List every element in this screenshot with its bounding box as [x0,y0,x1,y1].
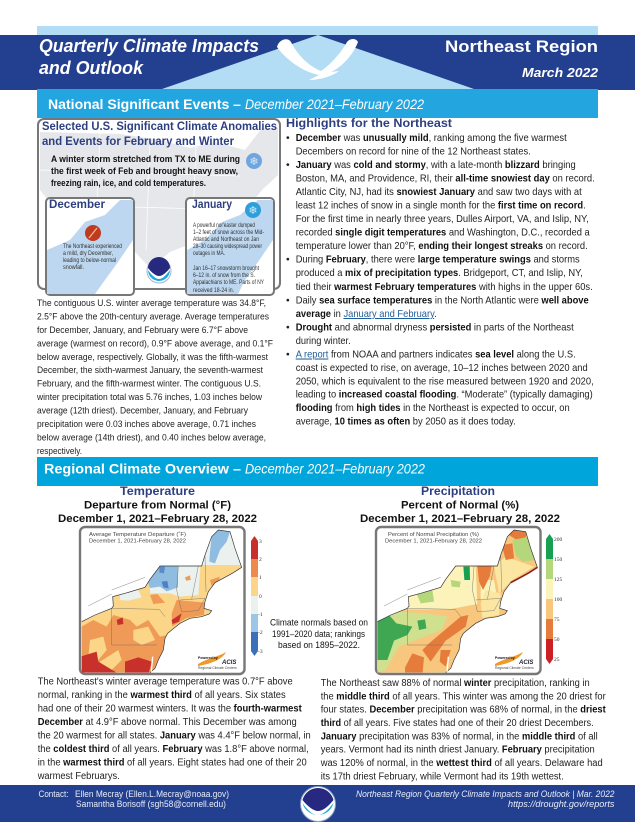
text block: temperature summary: warmest Februarys. [37,771,120,782]
text block: national summary: average (warmest on record), 0.9°F above average, and 0.1°F [37,338,273,349]
legend: precipitation colour scale: 50 [554,637,560,643]
legend: temperature colour scale: 3 [259,539,262,545]
December text: leading to below-normal [63,257,116,264]
heading: precipitation: Percent of Normal (%) [401,500,519,512]
chart: precipitation percent of normal map [376,527,541,675]
bullet: sea level report: leading to increased coastal flooding. “Moderate” (typically damaging) [296,390,593,401]
map title [89,531,186,544]
bullet: sea level report: coast is expected to rise, on average, 10–12 inches between 2020 and [296,363,588,374]
December text: a mild, dry December, [63,250,113,257]
legend: temperature colour scale: 0 [259,594,262,600]
note: climate normals: Climate normals based on [270,618,368,629]
heading: precipitation [360,486,560,525]
heading: temperature: December 1, 2021–February 28, 2022 [58,513,257,525]
bullet: January: For the first time in nearly three years, Dulles Airport, VA, and Islip, NY, [296,214,589,225]
title: and Outlook [39,57,145,78]
note: climate normals: based on 1895–2022. [278,640,360,651]
section heading: regional climate overview [37,457,598,486]
ACIS logo: Regional Climate Centers [198,666,237,670]
legend: temperature colour scale: -3 [258,649,263,655]
text block: national summary: precipitation were 0.03 inches above average, 0.71 inches [37,419,256,430]
inset: January: January [192,199,233,211]
bullet: February: produced a mix of precipitation types. Bridgeport, CT, and Islip, NY, [296,268,583,279]
map title [385,532,482,544]
winter storm text: freezing rain, ice, and cold temperatures. [51,177,206,188]
icon: warm temperature [85,225,101,241]
footer [0,785,635,822]
bullet: February: tied their warmest February temperatures with highs in the upper 60s. [296,282,593,293]
icon: triangle and bird emblem [162,35,474,89]
text block: precipitation summary: its 17th driest February, while Vermont had its 19th wettest. [321,771,564,782]
text block: temperature summary: the coldest third of all years. February was 1.8°F above normal, [38,744,309,755]
text block: national summary: respectively. [37,446,82,457]
contact details: Contact: [38,789,68,799]
contact details [38,789,229,809]
panel heading: Selected U.S. Significant Climate Anomalies [42,121,277,133]
heading: highlights: Highlights for the Northeast [286,118,452,130]
ACIS logo: Powered by [198,656,218,660]
report citation: https://drought.gov/reports [508,799,615,809]
winter storm text: the first week of Feb and brought heavy snow, [51,165,238,176]
heading: temperature: Departure from Normal (°F) [84,500,231,512]
text block: national summary: The contiguous U.S. winter average temperature was 34.8°F, [37,298,266,309]
text block: national summary: average (12th driest). December, January, and February [37,406,248,417]
legend: temperature colour scale: 2 [259,557,262,563]
bullet: sea level report: average, 10 times as often by 2050 as it does today. [296,416,516,427]
text block: national summary: below average, respectively. Globally, it was the fifth-warmest [37,352,268,363]
bullet: December [286,133,567,158]
bullet: January: • [286,160,290,171]
January text: 6–12 in. of snow from the S. [193,272,255,279]
January text: Jan 16–17 snowstorm brought [193,265,259,272]
map title: Average Temperature Departure (˚F) [89,531,186,538]
text block: temperature summary [37,677,311,782]
bullet: sea surface temperatures: Daily sea surface temperatures in the North Atlantic were well above [296,296,589,307]
inset: December [46,198,134,295]
section heading: national significant events: National Significant Events – [48,97,242,112]
bullet: sea level report: flooding from high tides in the Northeast is expected to occur, on [296,403,570,414]
heading: precipitation: Precipitation [421,486,495,498]
bullet: sea level report: 2050, which is equivalent to the rise measured between 1920 and 2020, [296,376,594,387]
January text: received 18-24 in. [193,287,234,294]
note: climate normals [270,618,368,651]
bullet: February: During February, there were large temperature swings and storms [296,255,580,266]
panel heading [42,121,277,148]
January text: 28–30 causing widespread power [193,243,262,250]
legend: temperature colour scale: 1 [259,575,262,581]
title [39,35,259,78]
text block: precipitation summary: The Northeast saw 88% of normal winter precipitation, ranking in [321,678,590,689]
map title: December 1, 2021-February 28, 2022 [89,538,186,544]
winter storm text [51,153,240,188]
text block: national summary [36,298,273,457]
legend: temperature colour scale: -2 [258,630,263,636]
January text: Atlantic and Northeast on Jan [193,236,259,243]
heading: temperature [58,486,257,525]
legend: precipitation colour scale: 75 [554,617,560,623]
section heading: national significant events: December 2021–February 2022 [245,96,424,112]
ACIS logo: ACIS [221,660,236,666]
report citation: Northeast Region Quarterly Climate Impacts and Outlook | Mar. 2022 [356,789,615,799]
bullet: drought: • [286,323,290,334]
legend: precipitation colour scale: 25 [554,657,560,663]
text block: precipitation summary [320,678,606,782]
text block: temperature summary: December at 4.9°F above normal. This December was among [38,717,297,728]
ACIS logo [198,652,237,670]
contact details: Ellen Mecray (Ellen.L.Mecray@noaa.gov) [75,789,229,799]
inset: December: December [49,199,106,211]
legend: precipitation colour scale: 200 [554,537,562,543]
section heading: national significant events [37,89,598,118]
bullet: January: recorded single digit temperatures and Washington, D.C., recorded a [296,228,590,238]
text block: national summary: below average (14th driest), and 0.40 inches below average, [37,432,266,444]
text block: precipitation summary: four states. December precipitation was 68% of normal, in the driest [321,705,606,716]
bullet: sea level report [286,350,594,427]
bullet: February: • [286,255,290,266]
bullet: January: Boston, MA, and Providence, RI, their all-time snowiest day on record. [296,174,595,184]
January text: Appalachians to ME. Parts of NY [193,279,264,286]
icon: nor'easter snow: ❄ [248,205,258,217]
bullet: December: Decembers on record for nine of the 12 Northeast states. [296,146,531,158]
bullet: sea surface temperatures: • [286,296,290,307]
text block: national summary: December, the sixth-warmest January, the seventh-warmest [37,365,263,376]
ACIS logo: Regional Climate Centers [495,666,534,670]
text block: precipitation summary: third of all years. Five states had one of their 20 driest Decembers. [321,718,594,729]
text block: national summary: 2.5°F above the 20th-century average. Average temperatures [37,311,269,322]
ACIS logo [495,652,534,670]
region and date: March 2022 [522,65,599,80]
bullet: drought: Drought and abnormal dryness persisted in parts of the Northeast [296,323,574,334]
section heading: regional climate overview: Regional Climate Overview – [44,462,242,476]
legend: precipitation colour scale: 150 [554,557,562,563]
region and date: Northeast Region [445,37,598,56]
January text [193,222,264,294]
region and date [445,37,599,80]
January text: 1–2 feet of snow across the Mid- [193,229,264,236]
bullet: December: December was unusually mild, ranking among the five warmest [296,133,567,144]
text block: temperature summary: had one of their 20 warmest winters. It was the fourth-warmest [38,704,302,714]
legend: precipitation colour scale: 125 [554,577,562,583]
text block: temperature summary: the 20 warmest for all states. January was 4.4°F below normal, in [38,731,311,742]
bullet: January: least 12 inches of snow in a single month for the first time on record. [296,200,586,212]
heading: temperature: Temperature [120,486,195,498]
legend: temperature colour scale: -1 [258,612,263,618]
bullet: sea level report: • [286,350,290,360]
bullet: sea surface temperatures: average in January and February. [296,309,437,320]
text block: precipitation summary: the middle third of all years. This winter was among the 20 driest for [321,691,606,702]
map title: December 1, 2021-February 28, 2022 [385,538,482,544]
bullet: February [286,255,593,293]
icon: NOAA logo [147,257,171,283]
December text: The Northeast experienced [63,243,122,250]
ACIS logo: Powered by [495,656,515,660]
text block: precipitation summary: January precipitation was 83% of normal, in the middle third of all [321,731,598,742]
legend: precipitation colour scale: 100 [554,597,562,603]
bullet: January: January was cold and stormy, with a late-month blizzard bringing [296,160,576,171]
US base map [40,128,278,268]
January text: A powerful nor'easter dumped [193,222,255,229]
text block: national summary: winter precipitation total was 5.76 inches, 1.03 inches below [36,392,262,403]
bullet: sea surface temperatures [286,296,589,320]
icon: NOAA logo [300,786,336,822]
chart: temperature departure map [80,527,245,677]
title: Quarterly Climate Impacts [39,35,259,56]
bullet: drought: during winter. [296,336,351,347]
contact details: Samantha Borisoff (sgh58@cornell.edu) [76,799,226,809]
text block: temperature summary: normal, ranking in the warmest third of all years. Six states [38,690,286,701]
panel: selected U.S. significant climate anomalies [38,119,280,295]
note: climate normals: 1991–2020 data; rankings [272,629,365,640]
bullet: December: • [286,133,290,144]
bullet: sea level report: A report from NOAA and partners indicates sea level along the U.S. [296,350,576,360]
text block: temperature summary: The Northeast's winter average temperature was 0.7°F above [38,677,293,688]
icon: snowflake: ❄ [249,156,259,168]
icon: snowflake [246,153,262,169]
report citation [356,789,615,809]
map title: Percent of Normal Precipitation (%) [388,532,479,538]
bullet: drought [286,323,574,347]
section heading: regional climate overview: December 2021–February 2022 [245,460,425,476]
text block: precipitation summary: years. Vermont had its ninth driest January. February precipitation [321,745,595,756]
inset: January [186,198,274,295]
winter storm text: A winter storm stretched from TX to ME during [51,153,240,164]
text block: national summary: for December, January, and February were 6.7°F above [37,325,248,336]
bullet: January: temperature lower than 20°F, ending their longest streaks on record. [296,241,588,252]
legend: temperature colour scale [251,536,263,656]
heading: precipitation: December 1, 2021–February 28, 2022 [360,513,560,525]
panel: highlights for the Northeast [286,118,595,427]
legend: precipitation colour scale [546,534,562,664]
bullet: January: Atlantic City, NJ, had its snowiest January and saw two days with at [296,187,582,198]
header banner [0,26,635,90]
bullet: January [286,160,595,252]
text block: national summary: February, and the fifth-warmest winter. The contiguous U.S. [37,379,261,390]
January text: outages in MA. [193,250,225,257]
ACIS logo: ACIS [518,660,533,666]
December text: snowfall. [63,264,84,271]
text block: temperature summary: in the warmest third of all years. Eight states had one of their 20 [38,757,307,768]
text block: precipitation summary: was 120% of normal, in the wettest third of all years. Delaware had [320,758,603,769]
panel heading: and Events for February and Winter [42,136,235,148]
December text [63,243,122,271]
